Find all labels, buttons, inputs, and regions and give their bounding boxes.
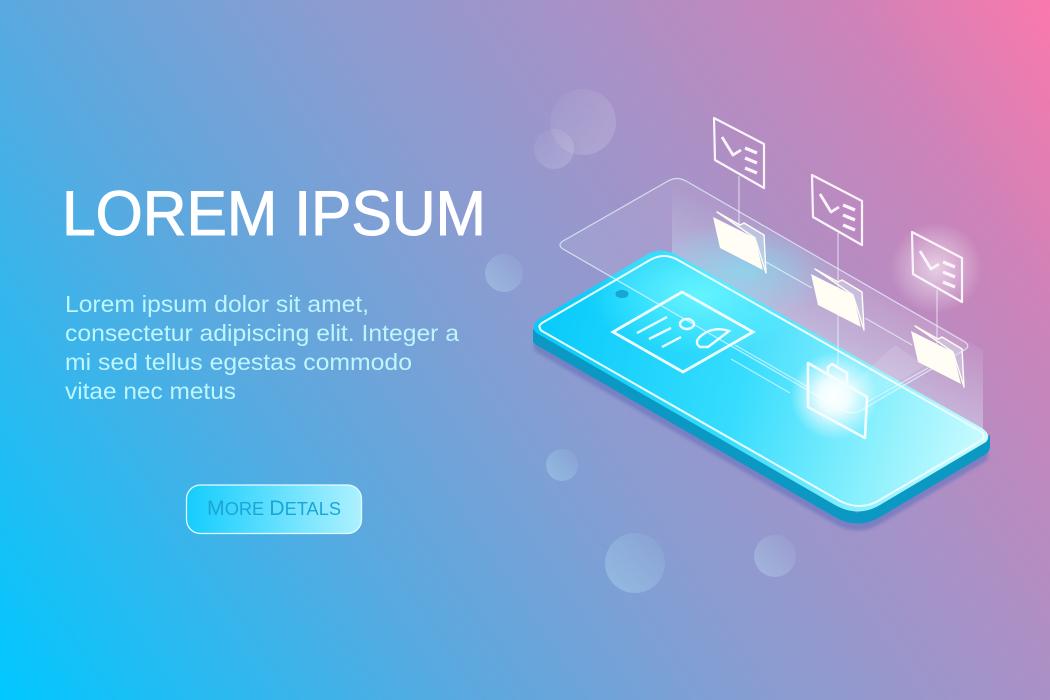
screen inner border: [539, 256, 984, 506]
body text: [65, 291, 459, 404]
checklist card glow: [890, 222, 982, 314]
phone shadow: [534, 270, 988, 530]
folder 3: [911, 326, 964, 387]
isometric phone illustration: [533, 118, 990, 530]
floating glass panel: [560, 178, 968, 413]
light beam: [672, 176, 983, 432]
camera dot: [616, 290, 628, 298]
phone side: [533, 329, 990, 524]
beam glow: [676, 230, 822, 308]
button: more details: MORE DETALS: [207, 497, 341, 520]
button: more details: [186, 485, 362, 534]
body text: vitae nec metus: [65, 378, 236, 404]
checklist card 2: [812, 175, 862, 245]
phone screen: [534, 250, 988, 512]
body text: consectetur adipiscing elit. Integer a: [65, 320, 459, 346]
folder 1: [713, 212, 766, 273]
checklist card 1: [714, 118, 764, 188]
checklist card 3: [912, 232, 962, 302]
decorative bubbles: [485, 89, 796, 593]
briefcase glow: [790, 352, 878, 440]
screen glow: [604, 250, 770, 344]
body text: Lorem ipsum dolor sit amet,: [65, 291, 369, 317]
fan of light to folder: [850, 345, 925, 400]
connector lines: [731, 176, 937, 402]
body text: mi sed tellus egestas commodo: [65, 349, 412, 375]
title: LOREM IPSUM: [62, 179, 486, 249]
folder 2: [811, 269, 864, 330]
briefcase icon: [808, 363, 867, 438]
document on screen: [613, 292, 753, 372]
